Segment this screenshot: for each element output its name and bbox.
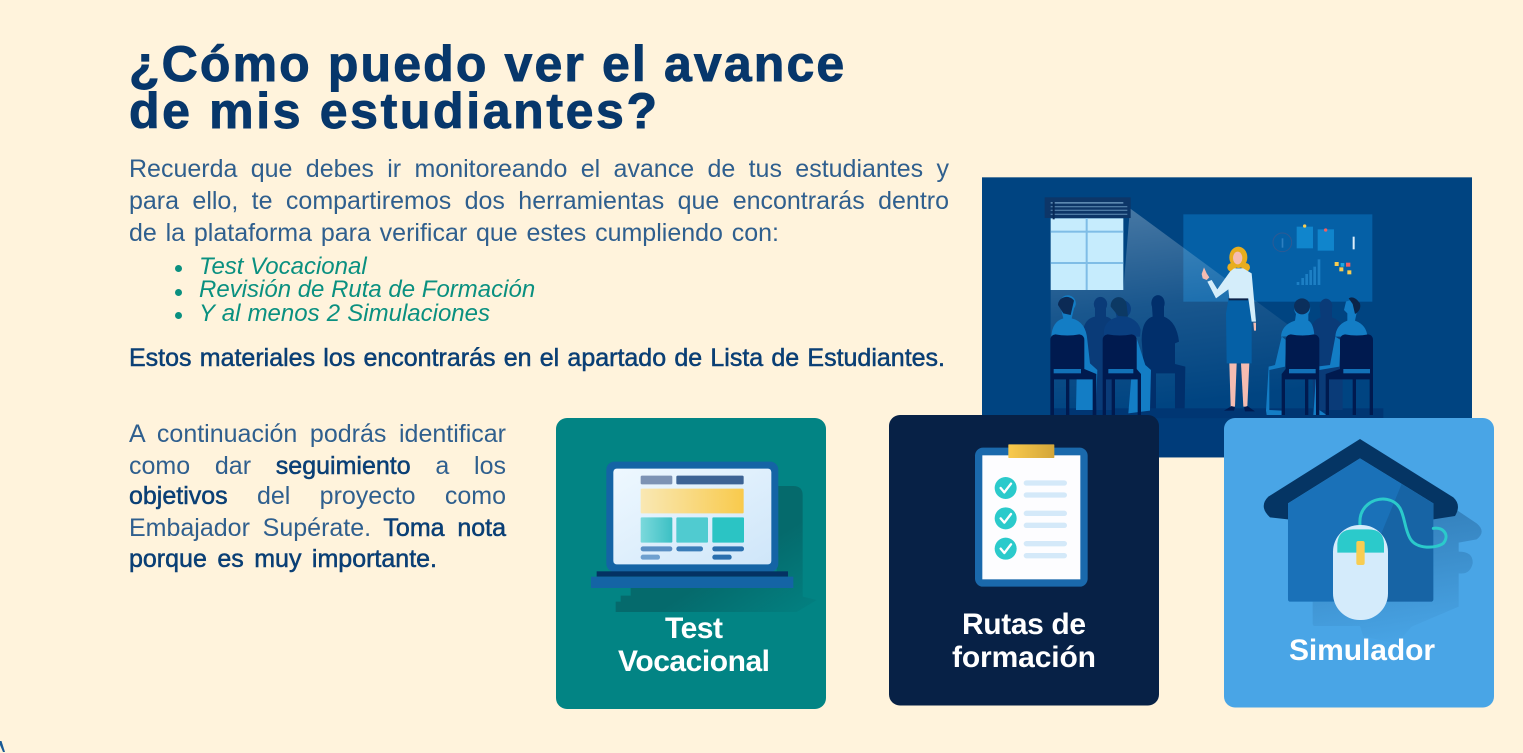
label: Vocacional bbox=[618, 645, 770, 678]
label bbox=[618, 612, 770, 678]
label: Rutas de bbox=[962, 608, 1086, 641]
label: Simulador bbox=[1289, 634, 1435, 667]
checklist of goals bbox=[175, 253, 535, 327]
follow-up paragraph bbox=[129, 420, 506, 573]
title: de mis estudiantes? bbox=[129, 83, 660, 139]
intro paragraph: Recuerda que debes ir monitoreando el avance de tus estudiantes y bbox=[129, 155, 949, 183]
card: Simulador bbox=[1224, 418, 1494, 708]
card: Test Vocacional bbox=[556, 418, 826, 709]
card: Rutas de formación bbox=[889, 415, 1159, 706]
follow-up paragraph: objetivos del proyecto como bbox=[129, 482, 506, 510]
title: ¿Cómo puedo ver el avance bbox=[129, 36, 846, 92]
follow-up paragraph: como dar seguimiento a los bbox=[129, 452, 506, 480]
title bbox=[129, 36, 846, 139]
icon: laptop bbox=[591, 462, 817, 612]
illustration: teacher presenting to a class bbox=[982, 177, 1472, 457]
intro paragraph bbox=[129, 155, 949, 247]
icon: clipboard checklist bbox=[975, 444, 1088, 587]
window light beam bbox=[1051, 208, 1313, 408]
materials note: Estos materiales los encontrarás en el apartado de Lista de Estudiantes. bbox=[129, 344, 945, 372]
intro paragraph: para ello, te compartiremos dos herramientas que encontrarás dentro bbox=[129, 187, 949, 215]
audience left bbox=[1050, 295, 1185, 415]
checklist of goals: Revisión de Ruta de Formación bbox=[199, 276, 535, 303]
label bbox=[952, 608, 1096, 674]
window bbox=[1045, 197, 1131, 290]
checklist of goals: Y al menos 2 Simulaciones bbox=[199, 300, 490, 327]
intro paragraph: de la plataforma para verificar que estes cumpliendo con: bbox=[129, 219, 779, 247]
projection board bbox=[1183, 214, 1372, 302]
label: formación bbox=[952, 641, 1096, 674]
checklist of goals: Test Vocacional bbox=[199, 253, 367, 280]
label: Test bbox=[665, 612, 723, 645]
icon: house with mouse bbox=[1264, 439, 1482, 643]
teacher bbox=[1202, 247, 1256, 411]
floor bbox=[1051, 408, 1403, 457]
audience right bbox=[1266, 297, 1373, 415]
follow-up paragraph: porque es muy importante. bbox=[129, 545, 437, 573]
follow-up paragraph: Embajador Supérate. Toma nota bbox=[129, 514, 506, 542]
corner mark bbox=[0, 741, 5, 752]
follow-up paragraph: A continuación podrás identificar bbox=[129, 420, 506, 448]
